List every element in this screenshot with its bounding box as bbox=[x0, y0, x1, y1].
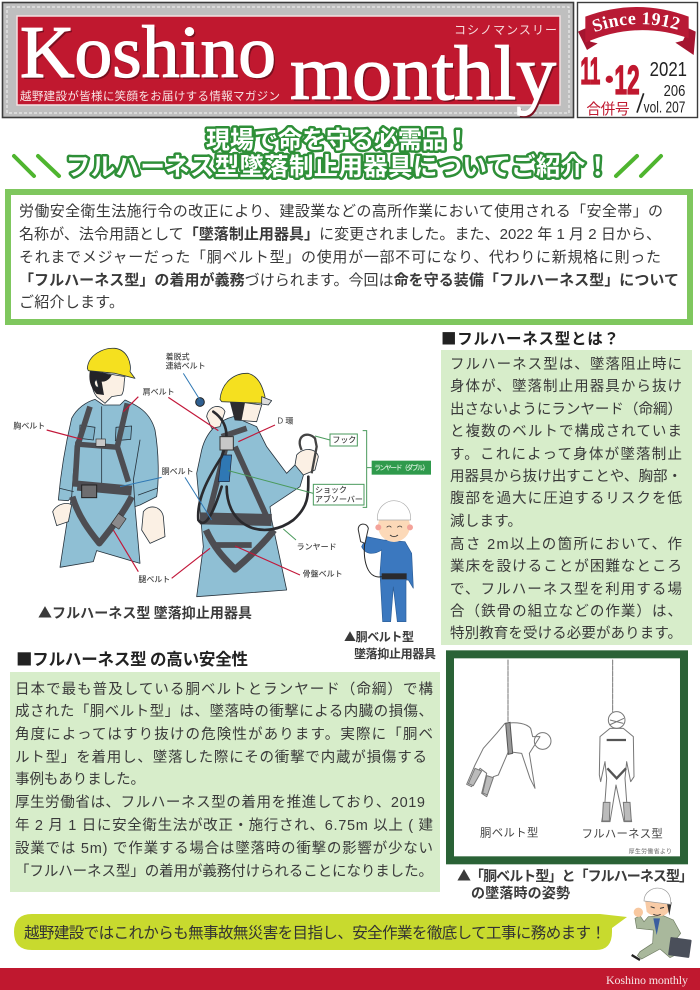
panel: what is full harness text: フルハーネス型は、墜落阻止時に bbox=[450, 356, 682, 373]
heading: high safety: ■フルハーネス型 の高い安全性 bbox=[16, 646, 248, 670]
panel: high safety text: 事例もありました。 bbox=[15, 771, 145, 788]
panel: what is full harness text: 腹部を過大に圧迫するリスクを低 bbox=[450, 490, 682, 507]
figure: front view worker bbox=[53, 348, 165, 567]
harness part labels: 腿ベルト bbox=[138, 574, 170, 584]
panel: what is full harness text: 出さないようにランヤード（命綱） bbox=[450, 401, 682, 418]
panel: high safety text bbox=[10, 672, 440, 892]
caption: posture comparison: の墜落時の姿勢 bbox=[471, 883, 570, 903]
headline slashes bbox=[14, 156, 661, 176]
caption: posture comparison bbox=[457, 866, 693, 903]
headline bbox=[14, 127, 661, 181]
panel: high safety text: ルト型」を着用し、墜落した際にその衝撃で内蔵が損傷する bbox=[15, 749, 427, 766]
harness part labels: アブソーバー bbox=[315, 494, 363, 504]
caption: waist belt equipment: 墜落抑止用器具 bbox=[354, 645, 436, 662]
panel: what is full harness text bbox=[441, 350, 692, 645]
harness part labels: 胴ベルト bbox=[162, 467, 194, 476]
title word: monthly: monthly bbox=[292, 32, 559, 118]
panel: what is full harness text: 減します。 bbox=[450, 513, 522, 530]
footer bar: Koshino monthly bbox=[606, 973, 688, 987]
harness part labels: D 環 bbox=[277, 416, 293, 425]
harness part labels: ランヤード bbox=[297, 542, 337, 551]
issue box: 11 bbox=[580, 50, 600, 93]
panel: what is full harness text: 身体が、墜落制止用器具から抜け bbox=[450, 378, 682, 395]
panel: introduction: ご紹介します。 bbox=[19, 294, 124, 311]
headline: フルハーネス型墜落制止用器具についてご紹介！ bbox=[66, 152, 610, 181]
diagram: falling posture comparison bbox=[450, 654, 684, 860]
masthead: Koshino monthly bbox=[2, 2, 574, 118]
harness part labels: 連結ベルト bbox=[166, 361, 206, 371]
panel: high safety text: 設業では 5m) で作業する場合は墜落時の衝撃の影響が少ない bbox=[15, 840, 433, 857]
harness part labels: ランヤード（ダブル） bbox=[374, 463, 429, 472]
diagram: falling posture comparison: フルハーネス型 bbox=[582, 827, 663, 841]
harness part labels: 胸ベルト bbox=[13, 420, 45, 430]
headline: 現場で命を守る必需品！ bbox=[206, 127, 470, 154]
harness part labels: 骨盤ベルト bbox=[303, 569, 343, 579]
issue box bbox=[576, 2, 698, 118]
figure: rear view worker bbox=[196, 373, 318, 597]
icon: waist belt worker bbox=[358, 501, 413, 622]
panel: introduction: 「フルハーネス型」の着用が義務づけられます。今回は命を守る装備「フルハーネス型」について bbox=[19, 271, 679, 289]
panel: introduction bbox=[8, 192, 690, 322]
footer bar bbox=[0, 968, 700, 990]
masthead: Koshino monthly: 越野建設が皆様に笑顔をお届けする情報マガジン bbox=[20, 89, 280, 103]
masthead: Koshino monthly: コシノマンスリー bbox=[454, 23, 557, 37]
panel: what is full harness text: す。これによって身体が墜落制止 bbox=[450, 446, 682, 463]
caption: waist belt equipment: ▲胴ベルト型 bbox=[344, 628, 414, 645]
panel: introduction: それまでメジャーだった「胴ベルト型」の使用が一部不可になり、代わりに新規格に則った bbox=[19, 249, 661, 266]
ribbon: Since 1912: Since 1912 bbox=[592, 12, 680, 32]
caption: posture comparison: ▲「胴ベルト型」と「フルハーネス型」 bbox=[457, 866, 693, 886]
harness part labels: ショック bbox=[315, 486, 347, 495]
panel: what is full harness text: で、フルハーネス型を利用する場 bbox=[450, 581, 682, 598]
icon: running businessman bbox=[632, 888, 692, 960]
panel: high safety text: 角度によってはすり抜けの危険性があります。実際に「胴ベ bbox=[15, 726, 433, 743]
panel: what is full harness text: と複数のベルトで構成されていま bbox=[450, 423, 682, 440]
speech bubble: 越野建設ではこれからも無事故無災害を目指し、安全作業を徹底して工事に務めます！ bbox=[24, 924, 606, 942]
heading: what is full harness: ■フルハーネス型とは？ bbox=[441, 327, 619, 349]
caption: waist belt equipment bbox=[344, 628, 436, 662]
panel: what is full harness text: 業床を設けることが困難なところ bbox=[450, 558, 682, 575]
issue box: vol. 207 bbox=[644, 100, 685, 117]
harness part labels: フック bbox=[332, 436, 356, 445]
panel: introduction: 労働安全衛生法施行令の改正により、建設業などの高所作業において使用される「安全帯」の bbox=[19, 203, 663, 220]
harness part labels bbox=[13, 351, 431, 584]
harness part labels: 肩ベルト bbox=[143, 387, 175, 396]
panel: high safety text: 日本で最も普及している胴ベルトとランヤード（命綱）で構 bbox=[15, 681, 434, 698]
issue box: 2021 bbox=[650, 58, 687, 81]
panel: what is full harness text: 合（鉄骨の組立などの作業）は、 bbox=[450, 603, 682, 620]
caption: full harness equipment: ▲フルハーネス型 墜落抑止用器具 bbox=[38, 603, 252, 623]
figure: full harness posture bbox=[599, 660, 634, 822]
title word: Koshino: Koshino bbox=[20, 12, 276, 94]
panel: high safety text: 厚生労働省は、フルハーネス型の着用を推進しており、2019 bbox=[15, 794, 425, 811]
panel: high safety text: 年 2 月 1 日に安全衛生法が改正・施行され、6.75m 以上 ( 建 bbox=[15, 817, 434, 834]
figure: waist belt posture bbox=[467, 660, 551, 797]
panel: what is full harness text: 高さ 2m以上の箇所において、作 bbox=[450, 536, 682, 553]
panel: what is full harness text: 特別教育を受ける必要があります。 bbox=[450, 625, 682, 642]
harness part labels: 着脱式 bbox=[166, 351, 190, 361]
diagram: falling posture comparison: 厚生労働省より bbox=[629, 848, 672, 856]
title word: monthly: monthly bbox=[290, 30, 557, 116]
panel: high safety text: 「フルハーネス型」の着用が義務付けられることになりました。 bbox=[15, 863, 433, 880]
panel: introduction: 名称が、法令用語として「墜落制止用器具」に変更されました。また、2022 年 1 月 2 日から、 bbox=[19, 226, 661, 243]
issue box: 合併号 bbox=[586, 101, 630, 118]
issue box: 12 bbox=[614, 57, 640, 103]
illustration: full harness workers bbox=[0, 327, 700, 990]
speech bubble bbox=[14, 914, 627, 950]
diagram: falling posture comparison: 胴ベルト型 bbox=[480, 825, 538, 839]
panel: what is full harness text: 用器具から抜け出すことや、胸部・ bbox=[450, 468, 682, 485]
issue box: 206 bbox=[664, 83, 685, 100]
title word: Koshino: Koshino bbox=[22, 14, 278, 96]
panel: high safety text: 成された「胴ベルト型」は、墜落時の衝撃による内臓の損傷、 bbox=[15, 703, 433, 720]
